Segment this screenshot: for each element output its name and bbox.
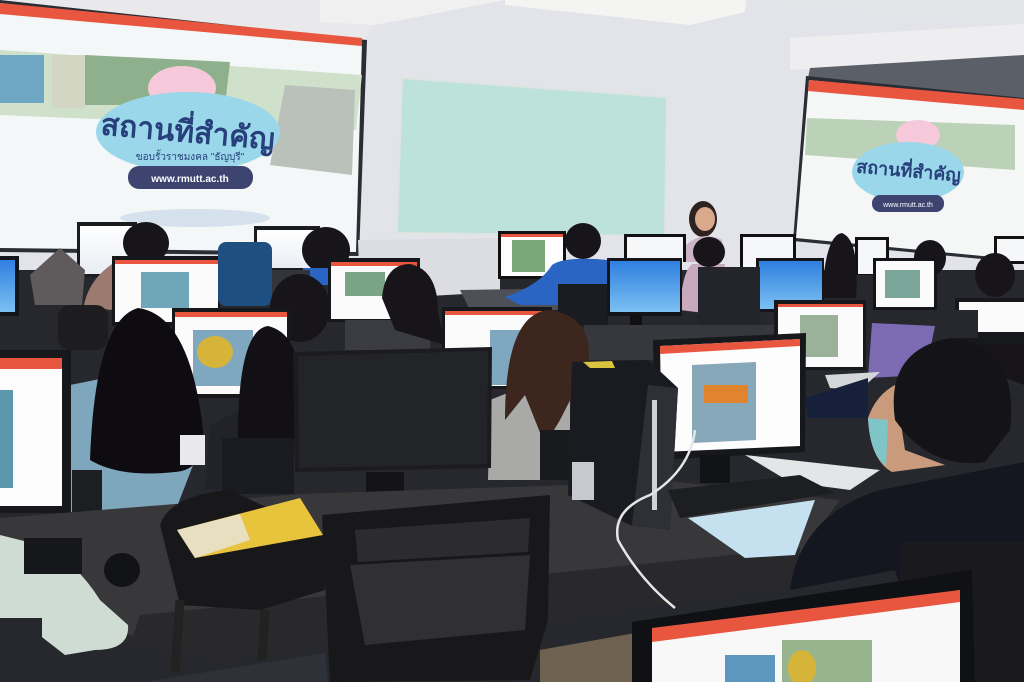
right projection screen [793, 76, 1024, 263]
front left student [0, 535, 140, 682]
foreground small monitor edge [145, 653, 328, 682]
mid right monitor [653, 333, 806, 483]
back row desk [460, 288, 600, 310]
wall below whiteboard [358, 238, 500, 300]
computer tower [568, 360, 678, 530]
back row monitors [77, 222, 1024, 279]
student dark hair middle [180, 326, 299, 494]
back row students [84, 222, 1015, 326]
middle equipment [30, 242, 864, 360]
bottom chair [900, 542, 1024, 682]
large black monitor back view [293, 347, 492, 506]
right projection screen: www.rmutt.ac.th [882, 202, 933, 209]
student in blue left [68, 308, 203, 512]
black bag and yellow book [160, 490, 325, 672]
forearm of student, right [805, 378, 868, 418]
middle row monitors [0, 256, 937, 326]
middle row students heads [270, 264, 1024, 385]
cables [617, 430, 695, 608]
left front monitor [0, 350, 102, 515]
air conditioner [505, 0, 746, 25]
student front right [790, 338, 1024, 682]
whiteboard [397, 78, 667, 236]
front middle monitors [172, 298, 1024, 398]
instructor [686, 201, 722, 262]
student grey jacket [488, 310, 589, 480]
keyboard [668, 475, 835, 518]
left projection screen: สถานที่สำคัญ [99, 103, 277, 158]
foreground monitor [632, 570, 975, 682]
left projection screen [0, 0, 367, 256]
office chair [322, 495, 550, 682]
main front desk [0, 455, 880, 682]
left projection screen: www.rmutt.ac.th [150, 174, 229, 185]
right projection screen: สถานที่สำคัญ [855, 154, 962, 187]
left projection screen: ขอบรั้วราชมงคล "ธัญบุรี" [136, 149, 245, 163]
